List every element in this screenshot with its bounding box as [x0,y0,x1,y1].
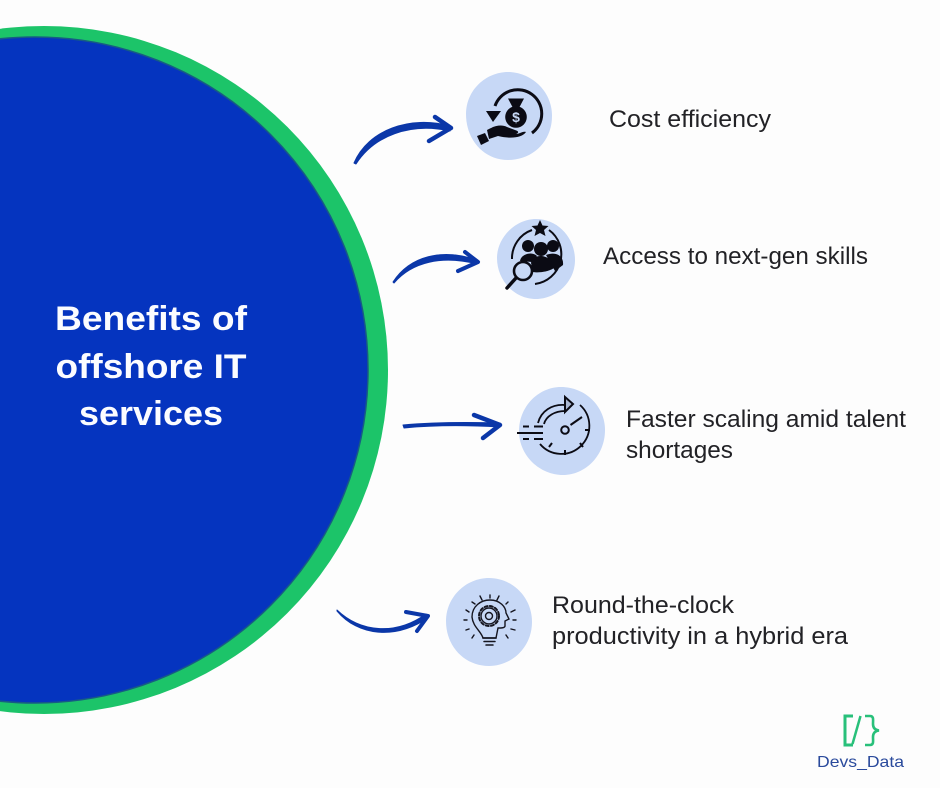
label: faster scaling: Faster scaling amid talent [626,406,906,433]
logo wordmark: Devs_Data [817,754,904,771]
arrow: to cost efficiency [354,117,451,164]
label: cost efficiency: Cost efficiency [609,106,771,133]
arrow: to next-gen skills [393,252,478,283]
label: next-gen skills: Access to next-gen skills [603,243,868,270]
label: faster scaling: shortages [626,437,733,464]
central circle [0,26,388,714]
title: offshore IT [56,348,247,386]
title: services [79,395,223,433]
star [532,220,548,236]
label: round-the-clock: productivity in a hybrid era [552,623,849,650]
logo [817,716,904,771]
icon: faster scaling [517,387,605,475]
icon: next-gen skills [497,219,575,299]
label: faster scaling [626,406,906,464]
dollar sign: $ [512,109,520,125]
label: round-the-clock: Round-the-clock [552,592,735,619]
title: Benefits of [55,300,248,338]
title [55,300,248,433]
icon: round-the-clock [446,578,532,666]
arrow: to faster scaling [403,415,500,438]
label: round-the-clock [552,592,849,650]
icon: cost efficiency [466,72,552,160]
arrow: to round-the-clock [337,610,428,632]
